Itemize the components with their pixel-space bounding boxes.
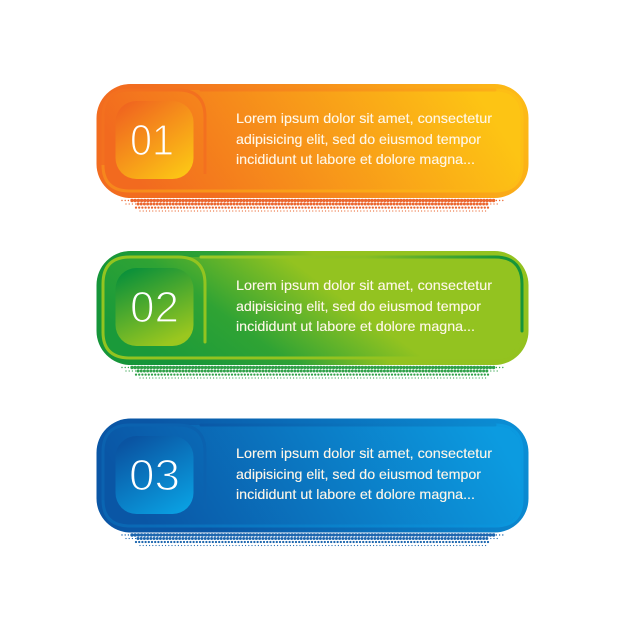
- text block 02: [236, 277, 492, 334]
- number badge 03: [116, 436, 194, 514]
- halftone shadow 02: [122, 368, 504, 378]
- number 01: 01: [130, 116, 174, 165]
- bottom inner ring 02: [103, 331, 522, 358]
- number badge 01: [116, 101, 194, 179]
- card body 03: [96, 418, 528, 532]
- text block 02: adipisicing elit, sed do eiusmod tempor: [236, 298, 481, 314]
- top inner line 03: [201, 424, 495, 426]
- top and right inner line 02: [201, 257, 522, 331]
- bracket around badge 01: [103, 90, 205, 174]
- text block 01: incididunt ut labore et dolore magna...: [236, 151, 475, 167]
- number badge 02: [116, 268, 194, 346]
- text block 01: [236, 110, 492, 167]
- card inner fill 03: [103, 425, 522, 526]
- text block 03: [236, 445, 492, 502]
- card body 01: [96, 84, 528, 198]
- halftone shadow 03: [122, 535, 504, 546]
- text block 02: Lorem ipsum dolor sit amet, consectetur: [236, 277, 492, 293]
- card inner fill 02: [103, 257, 522, 358]
- panel: step 02 green: [96, 251, 528, 378]
- card inner fill 01: [103, 90, 522, 191]
- halftone shadow 01: [122, 200, 504, 211]
- bracket around badge 03: [103, 425, 205, 509]
- text block 01: Lorem ipsum dolor sit amet, consectetur: [236, 110, 492, 126]
- card body 02: [96, 251, 528, 365]
- text block 03: incididunt ut labore et dolore magna...: [236, 486, 475, 502]
- bottom and right inner ring 03: [103, 425, 522, 526]
- panel: step 03 blue: [96, 418, 528, 546]
- number 02: 02: [130, 283, 179, 332]
- bottom and right inner ring 01: [103, 90, 522, 191]
- number 03: 03: [129, 451, 180, 500]
- top inner line 01: [201, 88, 495, 92]
- text block 01: adipisicing elit, sed do eiusmod tempor: [236, 131, 481, 147]
- text block 02: incididunt ut labore et dolore magna...: [236, 318, 475, 334]
- text block 03: Lorem ipsum dolor sit amet, consectetur: [236, 445, 492, 461]
- text block 03: adipisicing elit, sed do eiusmod tempor: [236, 466, 481, 482]
- panel: step 01 orange: [96, 84, 528, 211]
- bracket around badge 02: [103, 257, 205, 342]
